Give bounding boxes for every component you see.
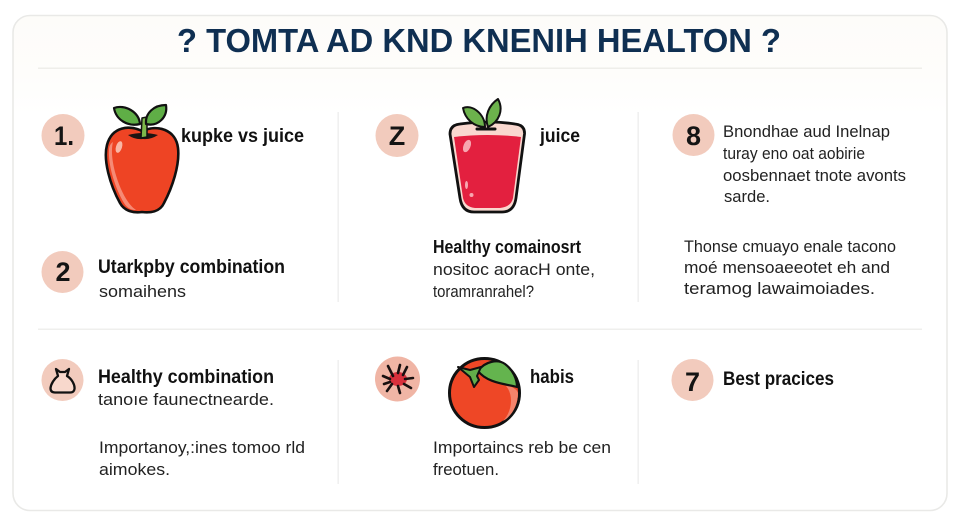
badge: number 1 [42,114,84,157]
panel: section 1 [42,105,304,212]
panel: section 4 [42,359,305,479]
label: habits: habis [530,367,574,388]
text: body [99,438,305,479]
label: juice: juice [539,126,580,147]
text: body: toramranrahel? [433,282,534,301]
text: intro: sarde. [724,187,770,206]
badge: number 7: 7 [685,367,700,397]
text: body: aimokes. [99,460,170,479]
text: subtitle: tanoıe faunectnearde. [98,390,274,409]
badge: number 8 [672,114,714,156]
text: body: freotuen. [433,460,499,479]
text: detail: Thonse cmuayo enale tacono [684,237,896,256]
text: body: nositoc aoracH onte, [433,260,595,279]
text: intro [723,122,906,206]
badge: number 7 [672,359,714,401]
text: detail: moé mensoaeeotet eh and [684,258,890,277]
panel: section 2 [42,251,285,301]
badge: number 2: 2 [55,257,71,287]
heading: healthy comparison: Healthy comainosrt [433,237,581,257]
panel: section habits [375,356,611,479]
text: intro: oosbennaet tnote avonts [723,166,906,185]
heading: best practices: Best pracices [723,369,834,390]
label: kupke vs juice: kupke vs juice [181,126,304,147]
text: body: Importanoy,:ines tomoo rld [99,438,305,457]
icon: apple [106,105,178,212]
text: body: Importaincs reb be cen [433,438,611,457]
panel: section 7 [672,359,834,401]
icon: tomato [450,358,520,428]
badge: number 2 [42,251,84,293]
text: body [433,260,595,301]
badge: bag icon [42,359,84,401]
badge: letter Z [376,114,418,157]
text: body: somaihens [99,282,186,301]
heading: healthy combination: Healthy combination [98,367,274,388]
panel: section 3 [672,114,906,298]
title: ? TOMTA AD KND KNENIH HEALTON ? [177,22,781,59]
badge: number 8: 8 [686,121,701,151]
heading: combination: Utarkpby combination [98,257,285,278]
text: detail: teramog lawaimoiades. [684,279,875,298]
badge: splat icon [375,356,420,402]
icon: juice glass [450,99,525,212]
text: intro: turay eno oat aobirie [723,144,865,163]
badge: letter Z: Z [389,121,405,151]
text: intro: Bnondhae aud Inelnap [723,122,890,141]
text: detail [684,237,896,298]
text: body [433,438,611,479]
panel: section juice [376,99,595,301]
badge: number 1: 1. [54,121,74,151]
